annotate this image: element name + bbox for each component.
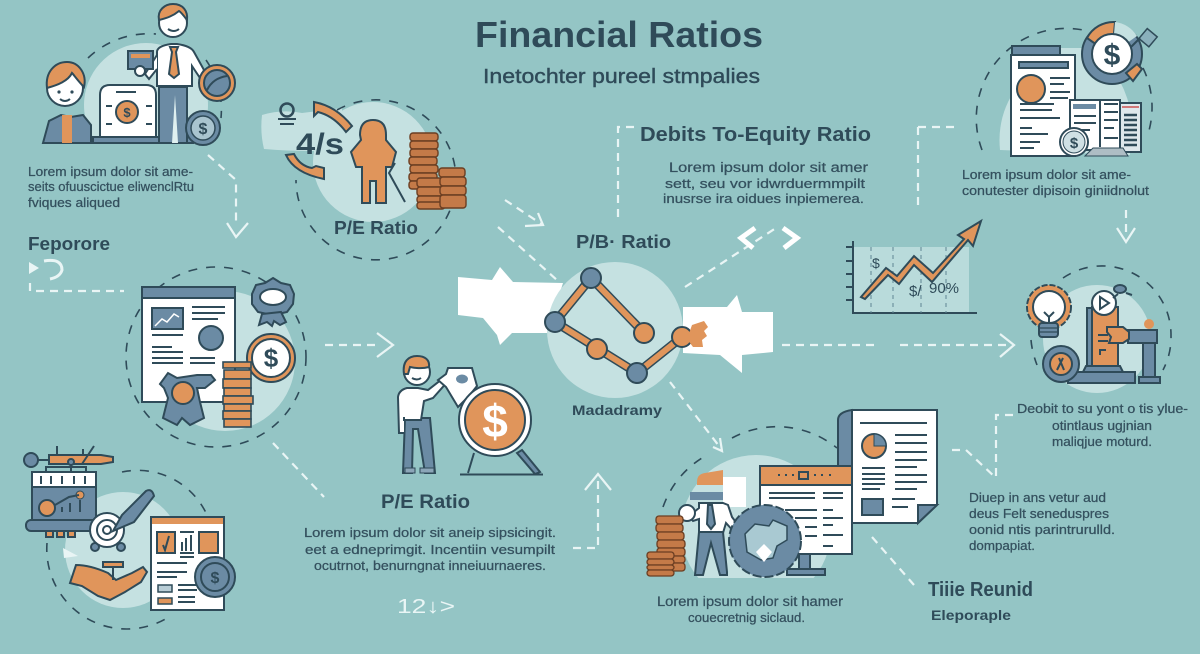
icon: round coin [1043,346,1079,382]
panel: report with coins left [126,267,306,447]
text block: lower P/E: Lorem ipsum dolor sit aneip sipsicingit. [304,526,556,540]
icon: machine: $ [123,105,131,120]
icon: dollar coin: $ [199,121,208,138]
chart: rising line [846,221,981,313]
icon: machine [93,85,193,143]
text block: Diuep: dompapiat. [969,539,1035,553]
text block: top left: Lorem ipsum dolor sit ame- [28,165,193,179]
icon: coin column [223,362,253,427]
connector: Debits heading [618,127,634,219]
arrow: left to centre [325,333,393,357]
text block: lower P/E [304,526,556,573]
icon: chart document [151,517,224,610]
icon: compass coin [199,65,235,101]
heading: P/B Ratio: P/B· Ratio [576,232,671,252]
icon: rosette badge [252,278,294,326]
ribbon: white right [683,295,773,373]
icon: gear bulb [1027,285,1071,337]
subtitle: Inetochter pureel stmpalies [483,66,760,88]
text block: lower centre: Lorem ipsum dolor sit hamer [657,594,844,609]
text block: lower P/E: ocutrnot, benurngnat inneiuurnaeres. [314,559,546,573]
icon: man with big coin: $ [482,395,508,447]
icon: small coin [1060,128,1088,156]
arrow: dashed diagonal lower left [273,443,324,497]
label: P/E Ratio: P/E Ratio [334,218,418,238]
text block: Debits: inusrse ira oidues inpiemerea. [663,192,864,206]
chart: rising line: 90% [929,280,959,297]
arrow: right down [1117,210,1135,242]
ribbon: white left [458,267,563,345]
panel: report and gear lower [647,410,937,608]
arrow: centre to lower panel [670,382,722,451]
icon: wrench bar [24,446,113,472]
icon: scale glyph [278,104,296,124]
heading: P/E Ratio lower: P/E Ratio [381,492,470,513]
icon: orange figure [351,120,405,203]
arrow: dashed down [208,155,248,237]
ratio label: 4/s [296,128,344,161]
icon: hand [70,562,147,600]
label: Madadramy: Madadramy [572,402,662,418]
chart: rising line: $/ [909,283,922,300]
text block: Diuep: oonid ntis parintrurulld. [969,523,1115,537]
panel: toolkit bottom left [24,446,235,629]
icon: report sheet [142,287,235,402]
icon: donut dollar: $ [1104,39,1121,72]
text block: top left: fviques aliqued [28,196,120,210]
icon: cycle arrows [286,102,352,179]
icon: dollar coin [186,111,220,145]
text block: top right: conutester dipisoin giniidnolut [962,184,1150,198]
icon: gear [729,505,801,577]
panel: documents top right [976,22,1157,156]
text block: right: Deobit to su yont o tis ylue- [1017,402,1188,416]
heading: Feporore: Feporore [28,234,110,254]
text block: lower P/E: eet a edneprimgit. Incentiin vesumpilt [305,543,556,557]
icon: monitor [760,466,852,575]
text block: Diuep [969,491,1115,553]
icon: coin stacks [647,516,685,576]
heading: Debits To-Equity: Debits To-Equity Ratio [640,124,871,146]
icon: man with magnifier [679,470,746,575]
arrow: centre to right [782,334,1014,357]
icon: small coin: $ [1070,135,1079,152]
icon: lever base [1068,319,1160,383]
text block: right [1017,402,1188,449]
decorative white numerals: 12↓> [397,596,455,618]
text block: top right [962,168,1150,198]
text block: Debits [663,160,869,206]
arrow: top diagonal to centre [498,200,558,281]
arrow: dashed up [573,474,611,548]
icon: play dial [1087,285,1132,368]
icon: donut dollar [1082,22,1157,84]
arrow: dashed to footer title [872,537,914,585]
arrow: chevrons to centre [685,228,797,287]
panel: idea machine right [1027,266,1171,393]
icon: coin stacks [409,133,466,209]
text block: top left [28,165,194,210]
icon: document stack [1011,46,1075,156]
text block: Diuep: Diuep in ans vetur aud [969,491,1106,505]
arrow: elbow dashed [952,415,1013,478]
icon: S coin: $ [211,570,220,587]
text block: right: otintlaus ugjnian [1052,419,1152,433]
text block: lower centre: couecretnig siclaud. [688,611,805,625]
icon: return arrow [29,260,124,291]
icon: dollar coin [247,334,295,382]
icon: slate ribbon [160,373,215,425]
icon: target and pencil [90,490,154,551]
text block: top left: seits ofuuscictue eliwenclRtu [28,180,194,194]
icon: S coin [195,557,235,597]
text block: Debits: Lorem ipsum dolor sit amer [669,160,869,175]
panel: P/E ratio top [261,100,466,260]
text block: Diuep: deus Felt seneduspres [969,507,1109,521]
chart: connected nodes [545,268,708,383]
icon: man standing [128,4,204,143]
heading: lower right: Tiiie Reunid [928,579,1033,601]
icon: dollar coin: $ [264,343,279,373]
text block: right: maliqjue moturd. [1052,435,1152,449]
icon: paper [838,410,937,523]
icon: dashboard device [26,472,97,537]
connector: dashed elbow top right [918,127,960,209]
text block: Debits: sett, seu vor idwrduermmpilt [665,177,866,191]
text block: lower centre [657,594,844,625]
chart: rising line: $ [872,255,880,271]
panel: centre ribbon and network [458,262,773,398]
icon: open book [1070,100,1141,156]
subheading: lower right: Eleporaple [931,607,1011,623]
title: Financial Ratios [475,14,763,55]
text block: top right: Lorem ipsum dolor sit ame- [962,168,1131,182]
panel: people with machine [43,4,235,145]
icon: boy [43,62,91,143]
icon: man with big coin [398,356,543,474]
